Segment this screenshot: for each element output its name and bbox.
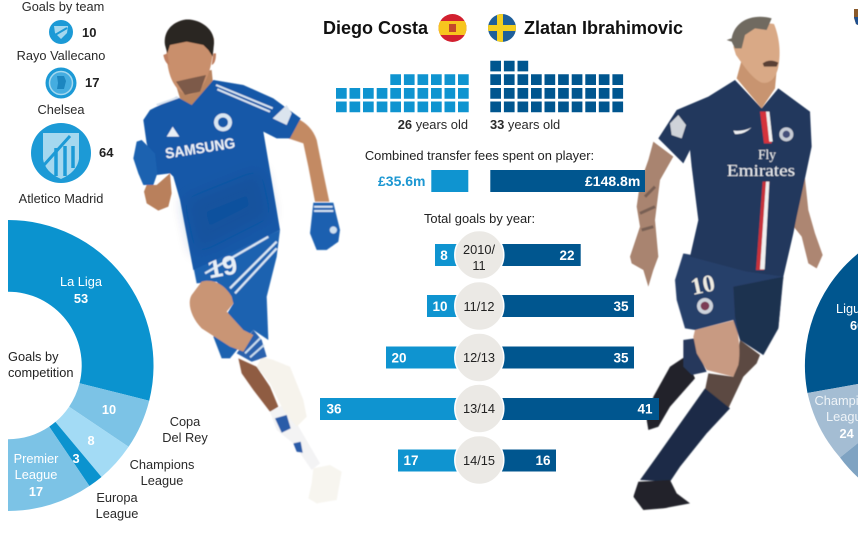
- title: Zlatan Ibrahimovic: Zlatan Ibrahimovic: [524, 18, 683, 38]
- row: 13/14: 13/14: [463, 401, 495, 416]
- label: Copa Del Rey: Copa: [170, 414, 200, 429]
- label: La Liga: La Liga: [60, 274, 103, 289]
- heading: transfer fees: Combined transfer fees spent on player:: [365, 148, 594, 163]
- segment: Ligue 1: [805, 254, 858, 393]
- label: Copa Del Rey: Del Rey: [162, 430, 208, 445]
- value: Atletico goals: 64: [99, 145, 114, 160]
- row: 11/12: 11/12: [463, 299, 495, 314]
- illustration: Zlatan Ibrahimovic running: [630, 17, 823, 510]
- chart: age blocks Costa: [336, 74, 469, 112]
- row: 12/13: 12/13: [463, 350, 495, 365]
- row: 12/13: [386, 333, 634, 382]
- illustration: Zlatan Ibrahimovic running: Fly: [758, 147, 776, 162]
- row: 13/14: 36: [326, 402, 342, 416]
- label: goals by competition: competition: [8, 365, 73, 380]
- row: 11/12: [427, 282, 634, 330]
- value: Europa League: 3: [72, 451, 80, 466]
- segment: Champions League: [55, 407, 129, 477]
- icon: Rayo Vallecano crest: [49, 20, 73, 44]
- value: Copa Del Rey: 10: [102, 402, 116, 417]
- chart: Costa goals by competition donut: [8, 220, 208, 521]
- row: 2010/11: [435, 230, 581, 280]
- bar: Costa transfer fee: [431, 170, 468, 192]
- segment: other competition: [840, 443, 858, 478]
- icon: Chelsea crest: [46, 68, 76, 98]
- row: 2010/11: 11: [472, 258, 486, 273]
- value: Champions League: 8: [87, 433, 95, 448]
- label: Ibrahimovic age: 33 years old: [490, 117, 560, 132]
- value: Chelsea goals: 17: [85, 75, 99, 90]
- row: 2010/11: 22: [559, 248, 575, 263]
- label: Champions League: Champions: [130, 457, 194, 472]
- segment: Champions League: [808, 384, 858, 458]
- segment: Premier League: [8, 427, 89, 511]
- label: Chelsea: Chelsea: [38, 102, 85, 117]
- icon: partial club crest: [854, 9, 858, 25]
- label: Europa League: League: [96, 506, 138, 521]
- label: Rayo Vallecano: Rayo Vallecano: [17, 48, 105, 63]
- title: Diego Costa: Diego Costa: [323, 18, 429, 38]
- row: 14/15: 16: [535, 453, 551, 468]
- row: 2010/11: 2010/: [463, 242, 495, 257]
- row: 13/14: 41: [637, 402, 653, 416]
- segment: Copa Del Rey: [69, 383, 149, 447]
- panel: goals by team: [17, 0, 114, 206]
- value: Rayo goals: 10: [82, 25, 96, 40]
- illustration: Diego Costa running: 19: [205, 250, 240, 284]
- illustration: Diego Costa running: SAMSUNG: [164, 136, 236, 163]
- label: Premier League: 17: [29, 484, 43, 499]
- chart: age blocks Ibrahimovic: [490, 61, 623, 112]
- icon: Sweden flag: [488, 14, 516, 42]
- label: Europa League: Europa: [96, 490, 138, 505]
- label: Champions League: League: [141, 473, 183, 488]
- row: 11/12: 35: [613, 299, 629, 314]
- icon: Spain flag: [438, 14, 467, 42]
- label: Premier League: Premier: [14, 451, 58, 466]
- illustration: Zlatan Ibrahimovic running: Emirates: [727, 161, 795, 180]
- row: 14/15: [398, 436, 556, 484]
- chart: goals by year: [320, 230, 659, 484]
- bar: Ibrahimovic transfer fee: £148.8m: [585, 173, 640, 189]
- label: Costa age: 26 years old: [398, 117, 468, 132]
- illustration: Diego Costa running: [133, 19, 342, 503]
- row: 12/13: 20: [391, 350, 407, 366]
- bar: Ibrahimovic transfer fee: [490, 170, 645, 192]
- value: Costa transfer fee: £35.6m: [378, 173, 425, 189]
- heading: total goals by year: Total goals by year:: [424, 211, 535, 226]
- label: Premier League: League: [15, 467, 57, 482]
- value: La Liga: 53: [74, 291, 88, 306]
- chart: Ibrahimovic goals by competition donut: [805, 254, 858, 478]
- label: goals by competition: Goals by: [8, 349, 59, 364]
- label: Atletico Madrid: Atletico Madrid: [19, 191, 103, 206]
- row: 12/13: 35: [613, 350, 629, 366]
- segment: Europa League: [49, 422, 102, 486]
- row: 14/15: 14/15: [463, 453, 495, 468]
- value: Champions League: 24: [840, 426, 855, 441]
- row: 2010/11: 8: [440, 248, 448, 263]
- row: 11/12: 10: [432, 299, 448, 314]
- icon: Atletico Madrid crest: [31, 123, 91, 183]
- segment: La Liga: [8, 220, 154, 401]
- row: 14/15: 17: [403, 453, 419, 468]
- illustration: Zlatan Ibrahimovic running: 10: [689, 270, 717, 301]
- row: 13/14: [320, 384, 659, 433]
